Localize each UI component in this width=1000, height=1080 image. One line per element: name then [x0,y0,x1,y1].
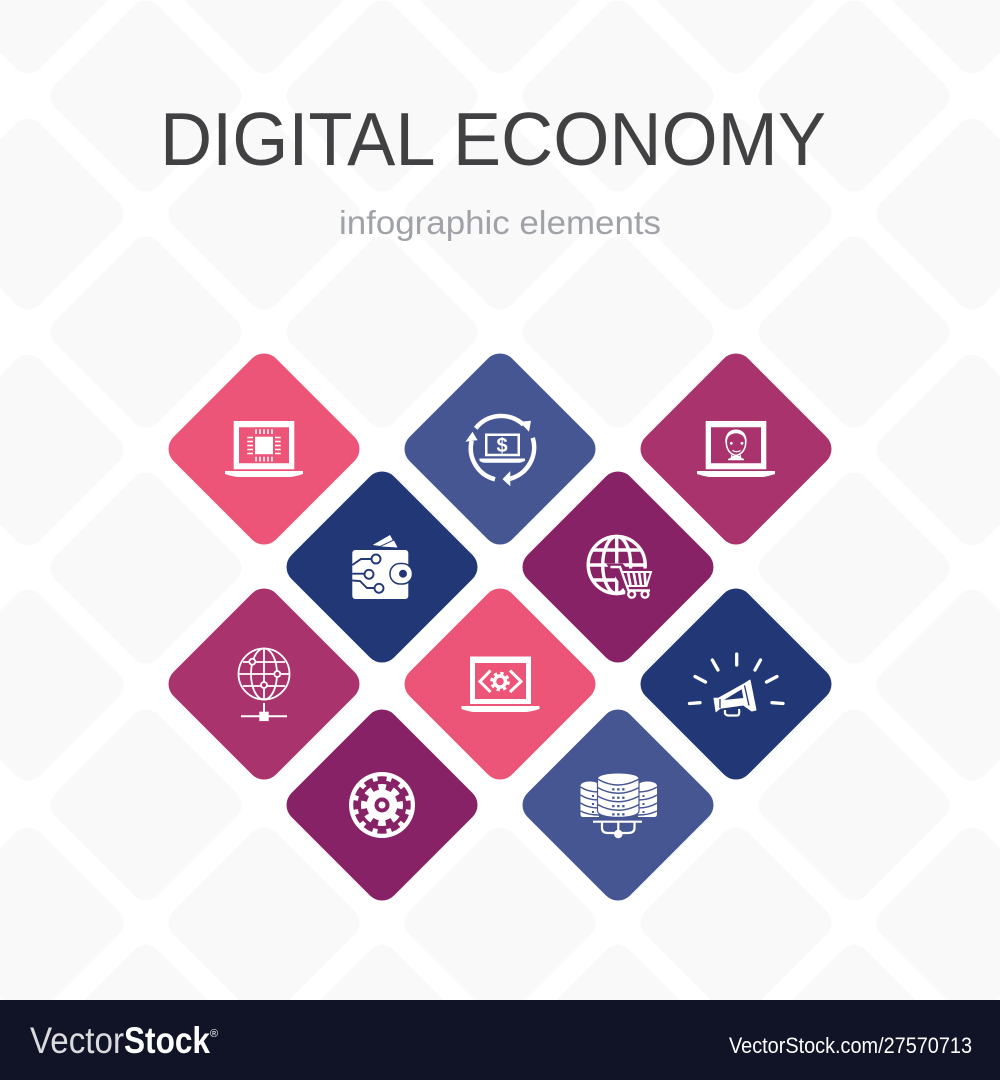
diamond: slate blue [397,346,603,552]
diamond: navy [633,581,839,787]
icon: globe network [238,648,290,721]
panel: database servers [515,702,721,908]
subtitle: infographic elements [339,204,661,241]
logo: VectorStock: Stock [124,1020,210,1061]
diamond: slate blue [515,702,721,908]
diamond: plum [633,346,839,552]
icon: laptop with dollar and circular arrows [466,416,534,486]
diamond: plum [161,581,367,787]
dollar sign: $ [496,435,508,457]
title: DIGITAL ECONOMY [160,97,826,181]
icon: database network [580,773,657,838]
icon: wallet with circuit lines [352,535,412,599]
panel: code on laptop [397,581,603,787]
icon: globe with shopping cart [588,536,654,599]
image id link text: VectorStock.com/27570713 [729,1033,972,1058]
panel: gear wheel [279,702,485,908]
panel: digital wallet [279,464,485,670]
diamond: pink [397,581,603,787]
panel: laptop with chip [161,346,367,552]
logo: VectorStock: ® [210,1028,218,1040]
icon: megaphone with rays [690,654,783,716]
icon: laptop with person face [697,421,775,477]
icon: laptop with code brackets and gear [462,656,540,712]
panel: money cycle [397,346,603,552]
logo: VectorStock [30,1020,218,1061]
panel: megaphone [633,581,839,787]
diamond: purple [279,702,485,908]
panel: network globe [161,581,367,787]
panel: laptop with face [633,346,839,552]
diamond: pink [161,346,367,552]
logo: VectorStock: Vector [30,1020,124,1061]
diamond: purple [515,464,721,670]
diamond: navy [279,464,485,670]
icon: gear inside gear wheel [349,772,415,838]
panel: global e-commerce [515,464,721,670]
icon: laptop with processor chip [225,421,303,477]
footer bar [0,1000,1000,1080]
